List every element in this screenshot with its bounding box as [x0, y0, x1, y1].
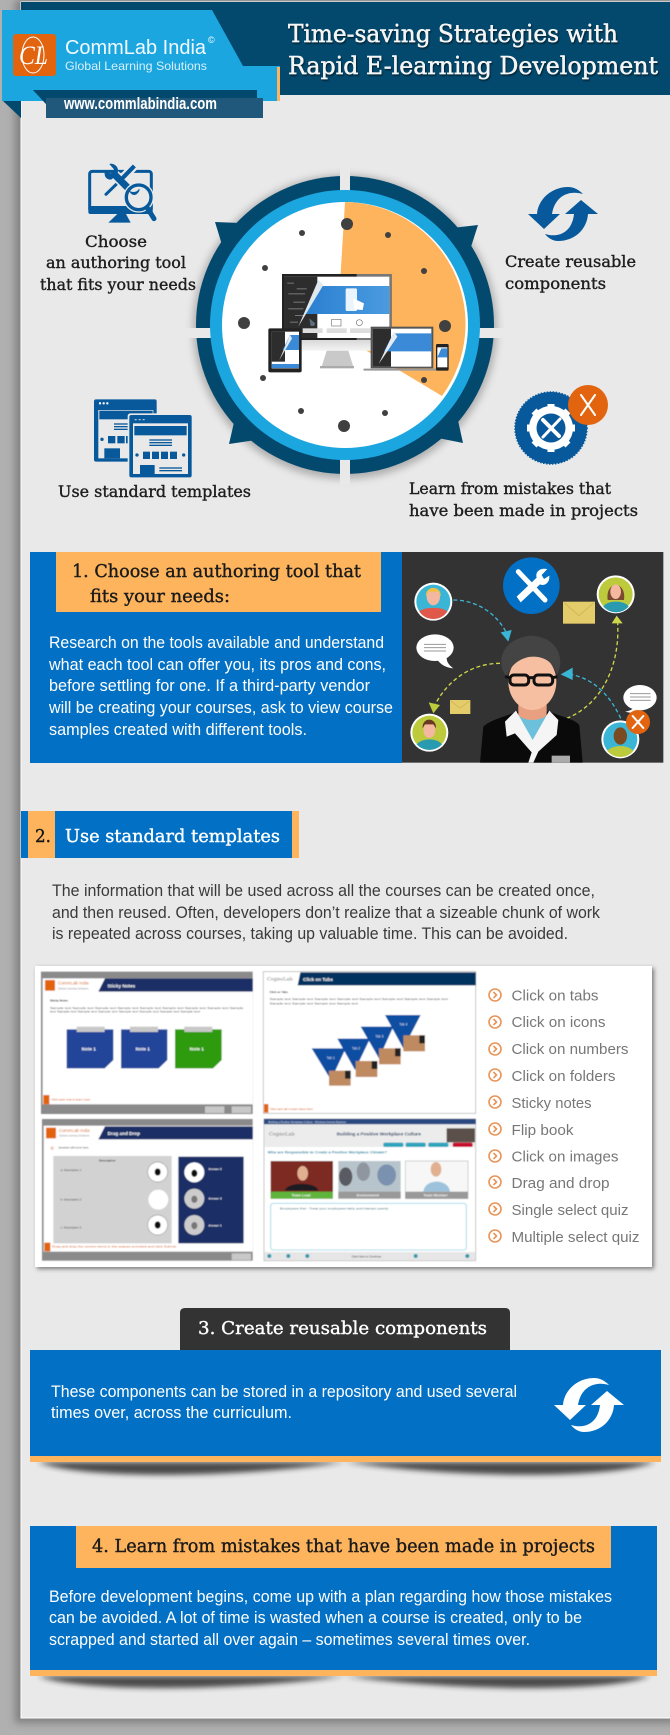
- logo mark: CL: [19, 41, 48, 70]
- panel: template screenshots: [35, 966, 654, 1269]
- body text 2: and then reused. Often, developers don’t realize that a sizeable chunk of work: [52, 903, 600, 922]
- devices: [268, 274, 449, 372]
- screen: click on images: Click Next to Continue: [352, 1254, 382, 1258]
- screen: click on images: Who are Responsible to Create a Positive Workplace Climate?: [268, 1150, 387, 1154]
- phone: [436, 344, 449, 371]
- list of interactivities: Drag and drop: [512, 1175, 610, 1192]
- screen: sticky notes: Note 1: [136, 1047, 150, 1052]
- error badge: [626, 710, 650, 734]
- logo wordmark: Global Learning Solutions: [65, 59, 207, 73]
- screen: sticky notes: text Sample text Sample text Sample text Sample text Sample text Sample text Sample text: [50, 1010, 200, 1014]
- label: choose an authoring tool: [40, 232, 196, 294]
- title bar: [21, 2, 670, 95]
- screen: click on images: Environment: [357, 1193, 380, 1197]
- clock dots: [238, 218, 451, 432]
- title: Time-saving Strategies with: [288, 20, 618, 48]
- heading 1: fits your needs:: [90, 586, 230, 607]
- list of interactivities: Click on folders: [512, 1068, 616, 1085]
- screen: sticky notes: Sticky Notes: [50, 998, 68, 1002]
- list of interactivities: Flip book: [512, 1122, 574, 1139]
- icon: gear with cross: [515, 385, 608, 464]
- screen: click on tabs: Sample text Sample text Sample text Sample text Sample text Sample text Sample text Sample text: [270, 997, 448, 1001]
- label: learn from mistakes: [409, 479, 638, 520]
- orange banner edge: [277, 67, 280, 101]
- heading 1: 1. Choose an authoring tool that: [72, 561, 362, 582]
- body text 4: scrapped and started all over again – sometimes several times over.: [49, 1630, 530, 1649]
- section 2 heading: Use standard templates: [65, 826, 280, 847]
- screen: drag and drop: Question will come here: [58, 1146, 89, 1150]
- list of interactivities: Click on images: [512, 1148, 618, 1166]
- screen: click on tabs: Tab 4: [399, 1023, 408, 1027]
- front window: [128, 413, 193, 479]
- screen: click on tabs: CognoLab: [267, 977, 293, 983]
- screen: click on images: Employees first - Treat your employees fairly and interact openly: [280, 1206, 389, 1210]
- screen: sticky notes: Note 1: [190, 1047, 204, 1052]
- logo wordmark: ©: [208, 35, 215, 45]
- screen: sticky notes: Sticky Notes: [107, 983, 136, 988]
- screen: drag and drop: Answer 3: [208, 1197, 222, 1201]
- avatars: [410, 575, 639, 758]
- body text 3: [51, 1382, 517, 1422]
- label: learn from mistakes: Learn from mistakes that: [409, 479, 612, 498]
- body text 4: [49, 1587, 612, 1649]
- screen: click on tabs: Tab 1: [327, 1056, 335, 1060]
- white clock face: [222, 202, 468, 448]
- icon: refresh arrows: [528, 187, 598, 241]
- section 2 heading: 2.: [35, 826, 51, 847]
- envelopes: [450, 602, 595, 714]
- body text 1: samples created with different tools.: [49, 720, 307, 739]
- screen: drag and drop: c. Description 3: [61, 1225, 82, 1229]
- screen: sticky notes: Click each note to learn more: [51, 1097, 90, 1101]
- body text 3: times over, across the curriculum.: [51, 1403, 292, 1422]
- label: learn from mistakes: have been made in projects: [409, 501, 638, 520]
- label: choose an authoring tool: that fits your needs: [40, 275, 196, 294]
- screen: drag and drop: Q:: [51, 1146, 54, 1150]
- label: use standard templates: Use standard templates: [58, 482, 251, 501]
- logo banner: [2, 10, 280, 101]
- screen: sticky notes: Sample text Sample text Sample text Sample text Sample text Sample text Sample text Sample text Sample: [50, 1006, 244, 1010]
- blue ring: [210, 190, 480, 460]
- screen: sticky notes: CommLab India: [58, 980, 89, 985]
- screen: drag and drop: Drag and Drop: [108, 1131, 140, 1136]
- person: [480, 636, 583, 763]
- screen: click on tabs: Click on Tabs: [270, 990, 288, 994]
- tablet: [268, 328, 302, 372]
- body text 1: what each tool can offer you, its pros and cons,: [48, 655, 386, 674]
- label: create reusable components: [505, 252, 636, 293]
- heading 4: 4. Learn from mistakes that have been made in projects: [92, 1537, 595, 1557]
- body text 1: [48, 633, 393, 739]
- bullets: [489, 989, 501, 1242]
- screen: click on tabs: Click on Tabs: [303, 977, 333, 982]
- screenshots left column: [41, 972, 253, 1261]
- body text 2: is repeated across courses, taking up valuable time. This can be avoided.: [52, 924, 568, 943]
- heading tab 3: [180, 1308, 510, 1350]
- logo wordmark: [65, 35, 215, 73]
- icon: white refresh arrows: [554, 1378, 624, 1432]
- body text 1: before settling for one. If a third-party vendor: [49, 676, 370, 695]
- illustration: communication: [402, 552, 663, 763]
- logo wordmark: CommLab India: [65, 37, 207, 59]
- section 2 heading: [21, 811, 299, 858]
- speech bubbles: [416, 634, 657, 713]
- screen: drag and drop: b. Description 2: [61, 1198, 82, 1202]
- dashed arrows: [435, 600, 621, 718]
- screen: sticky notes: Global Learning Solutions: [58, 986, 89, 990]
- label: choose an authoring tool: Choose: [85, 232, 147, 251]
- header: [2, 2, 670, 118]
- icon: templates: [94, 399, 193, 479]
- heading 4: [76, 1526, 611, 1568]
- screen: drag and drop: a. Description 1: [61, 1168, 82, 1172]
- panel: section 4: [30, 1526, 657, 1688]
- outer ring with spikes: [196, 176, 494, 474]
- screen: sticky notes: Note 1: [82, 1047, 96, 1052]
- screen: click on tabs: [263, 972, 476, 1113]
- title: [288, 20, 658, 80]
- screen: click on images: Team Lead: [292, 1193, 311, 1197]
- clock diagram: [186, 165, 504, 485]
- screen: click on images: Building a Positive Workplace Culture: [337, 1132, 422, 1137]
- screen: click on tabs: Sample text Sample text Sample text Sample text: [270, 1001, 358, 1005]
- body text 4: Before development begins, come up with a plan regarding how those mistakes: [49, 1587, 612, 1606]
- screen: click on tabs: Click each tab to learn about them: [270, 1107, 314, 1111]
- list of interactivities: Click on icons: [512, 1014, 606, 1031]
- screenshots middle column: [263, 972, 476, 1261]
- back window: [94, 399, 157, 462]
- body text 1: will be creating your courses, ask to view course: [48, 698, 393, 717]
- body text 4: can be avoided. A lot of time is wasted when a course is created, only to be: [49, 1608, 582, 1627]
- orange wedge: [337, 202, 466, 396]
- screen: drag and drop: Description: [99, 1159, 116, 1163]
- list of interactivities: Single select quiz: [512, 1202, 628, 1219]
- body text 1: Research on the tools available and understand: [49, 633, 384, 652]
- monitor: [282, 274, 392, 368]
- body text 2: [52, 881, 600, 943]
- title: Rapid E-learning Development: [288, 52, 658, 80]
- laptop: [363, 327, 437, 371]
- list of interactivities: Multiple select quiz: [512, 1229, 640, 1246]
- list of interactivities: Sticky notes: [512, 1095, 592, 1112]
- website ribbon: www.commlabindia.com: [63, 94, 217, 113]
- logo mark: [13, 34, 56, 76]
- panel: section 1: [30, 552, 663, 763]
- heading tab 3: 3. Create reusable components: [198, 1318, 487, 1339]
- screen: drag and drop: Answer 1: [208, 1223, 222, 1227]
- label: create reusable components: components: [505, 274, 606, 293]
- screen: click on tabs: Tab 3: [375, 1035, 384, 1039]
- fold triangle: [2, 100, 21, 118]
- list of interactivities: Click on tabs: [512, 988, 598, 1004]
- tools badge: [503, 557, 560, 614]
- body text 3: These components can be stored in a repository and used several: [51, 1382, 517, 1401]
- list of interactivities: Click on numbers: [512, 1041, 628, 1058]
- label: create reusable components: Create reusable: [505, 252, 636, 271]
- screen: drag and drop: CommLab India: [59, 1128, 90, 1133]
- screen: click on tabs: Tab 2: [352, 1047, 360, 1051]
- screen: click on images: CognoLab: [269, 1131, 295, 1137]
- screen: click on images: Team Member: [423, 1193, 448, 1197]
- screen: drag and drop: [42, 1119, 253, 1261]
- screen: drag and drop: Global Learning Solutions: [59, 1134, 90, 1138]
- icon: monitor with tools: [88, 164, 154, 223]
- label: choose an authoring tool: an authoring tool: [46, 253, 186, 272]
- heading 1: [56, 552, 381, 612]
- screen: sticky notes: [41, 972, 253, 1114]
- panel: section 3: [30, 1308, 661, 1475]
- list of interactivities: [489, 988, 640, 1246]
- screen: drag and drop: Drag and drop the correct items in the spaces provided and click Submit.: [52, 1245, 177, 1249]
- screen: click on images: [264, 1119, 476, 1261]
- body text 2: The information that will be used across all the courses can be created once,: [52, 881, 595, 900]
- screen: drag and drop: Answer 2: [208, 1167, 222, 1171]
- website ribbon: [33, 90, 263, 118]
- screen: click on images: Building a Positive Workplace Culture - Windows Internet Explorer: [268, 1120, 346, 1124]
